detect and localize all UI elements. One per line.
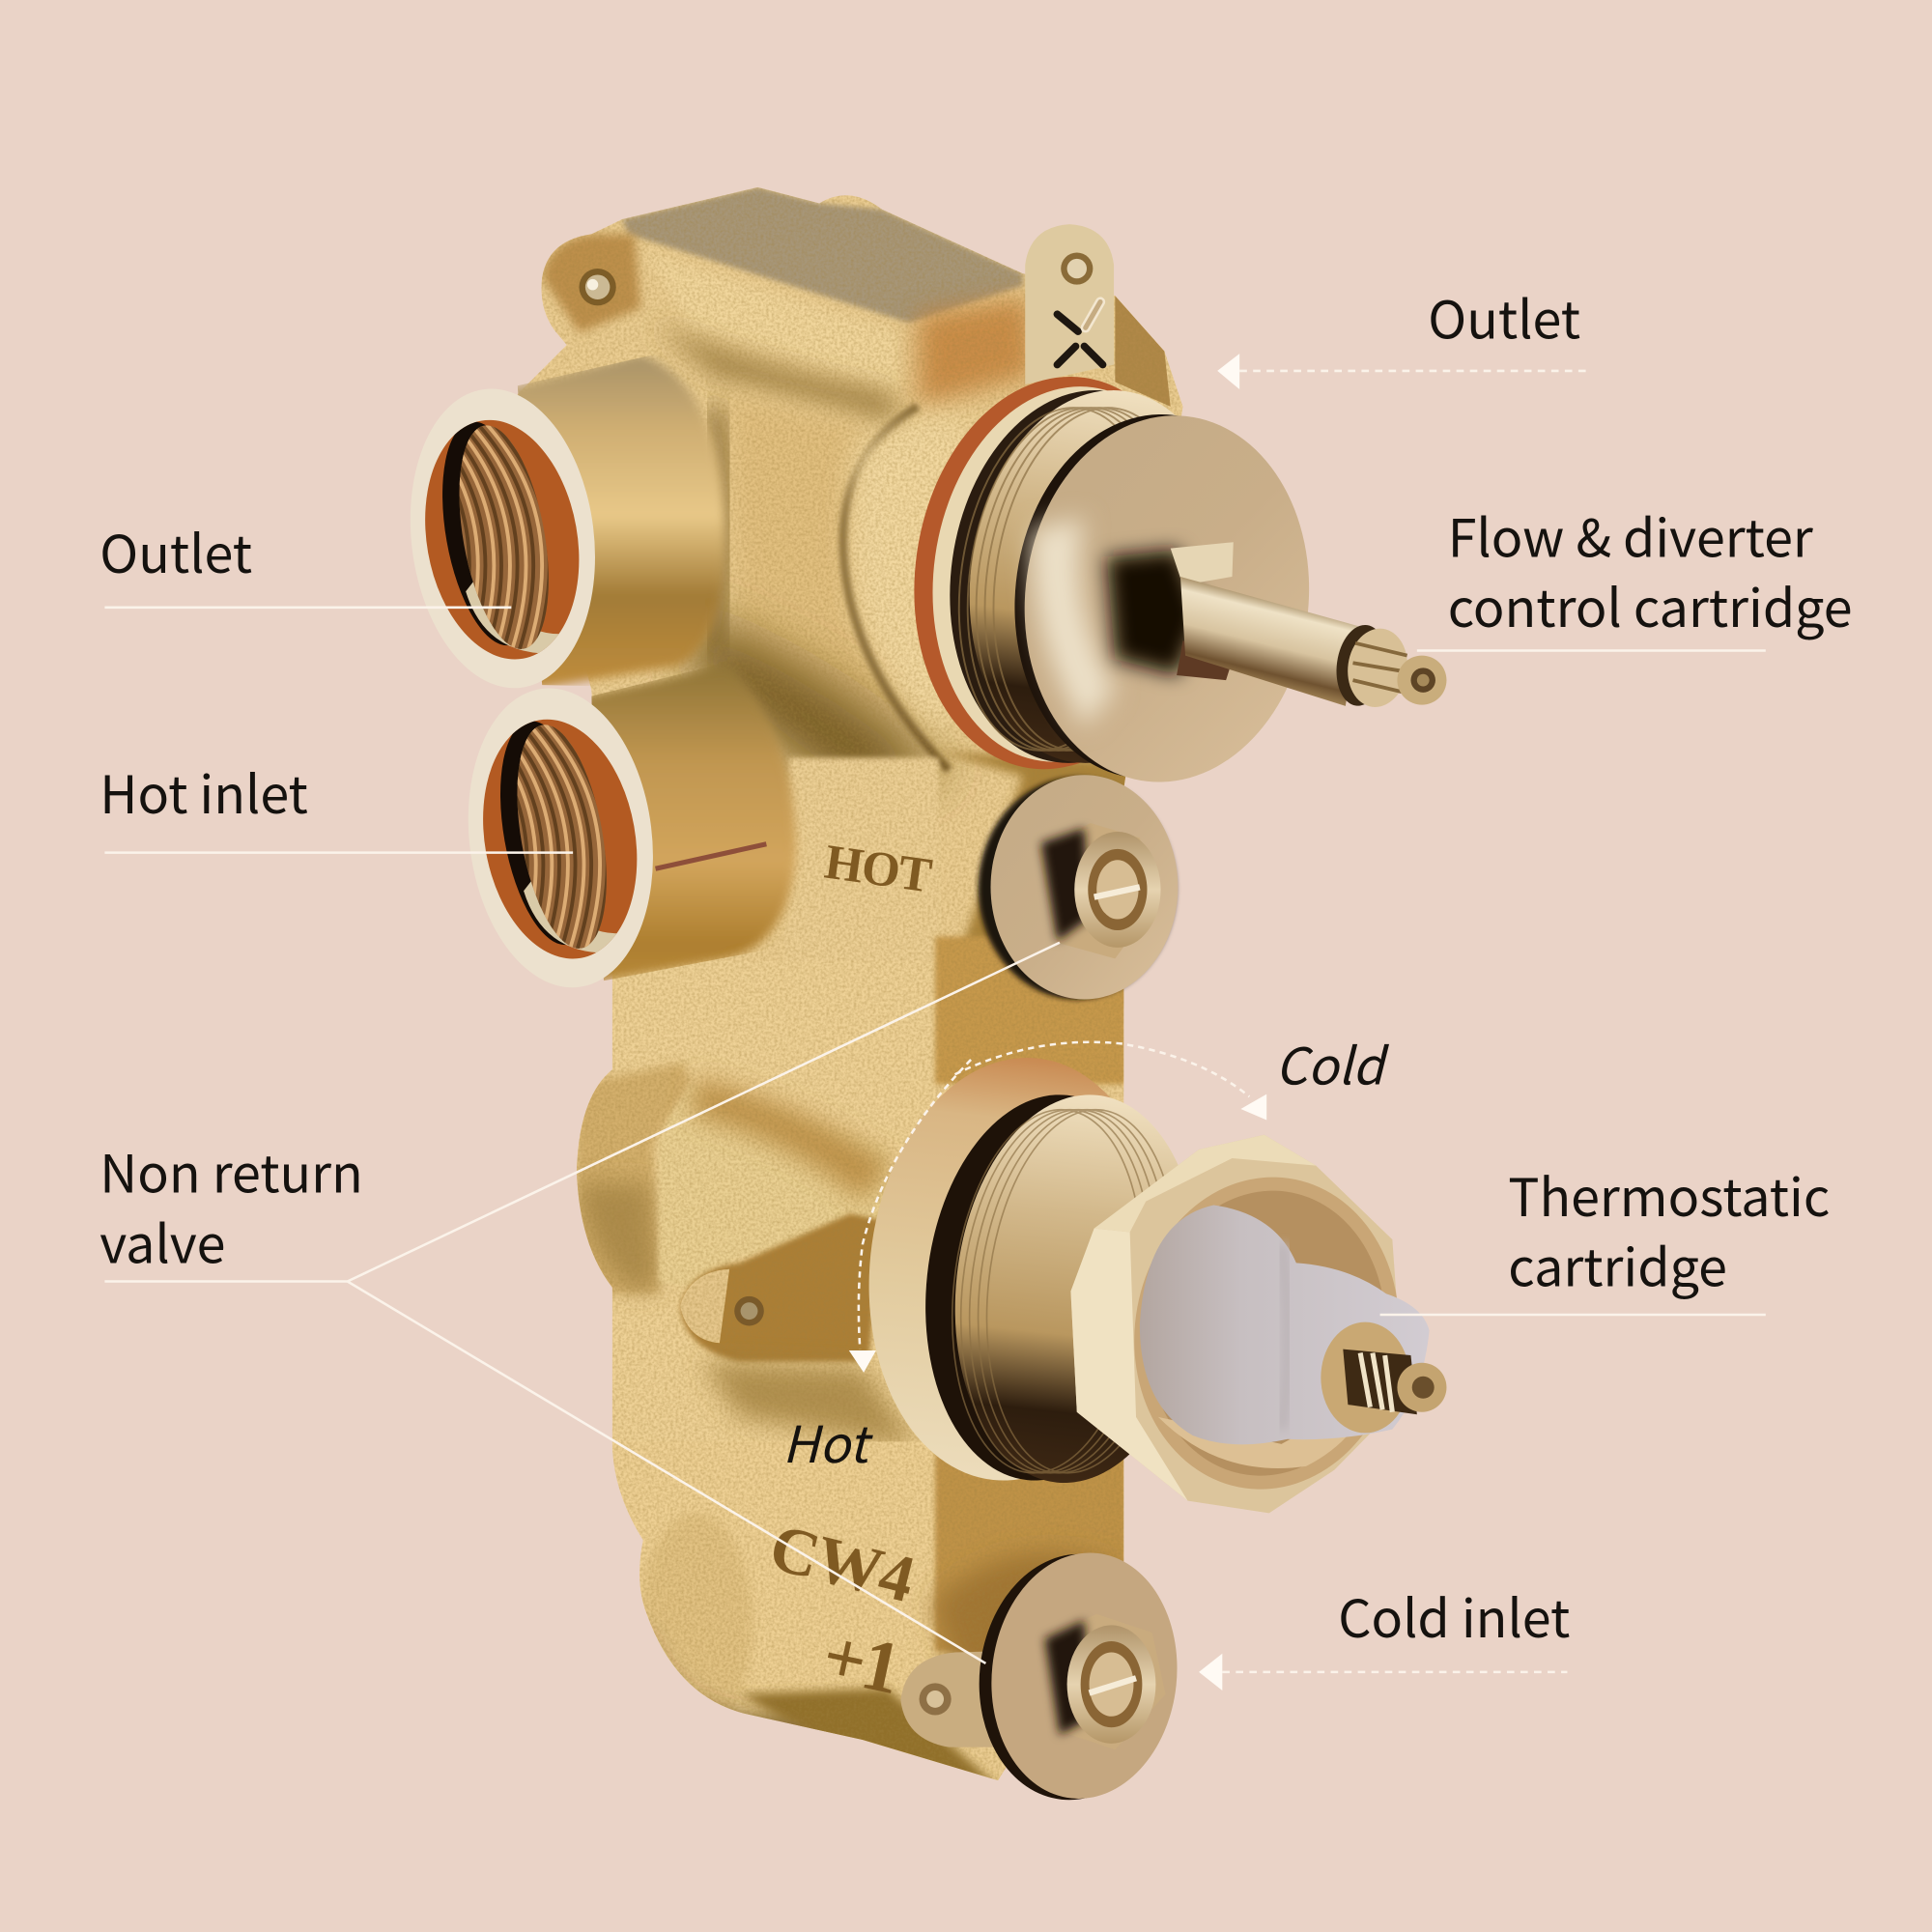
- hot inlet port: [452, 666, 796, 998]
- arrow: rotation to cold: [955, 1042, 1266, 1120]
- cast marking: CW4: CW4: [763, 1510, 922, 1616]
- arrow: outlet right: [1217, 354, 1586, 389]
- arrow: cold inlet: [1199, 1654, 1567, 1690]
- label: cold inlet: Cold inlet: [1338, 1577, 1570, 1653]
- label: non return valve: Non return: [99, 1133, 363, 1208]
- control stem: [1180, 577, 1446, 711]
- white cartridge insert: [1140, 1205, 1430, 1444]
- infographic canvas: [100, 187, 1851, 1801]
- label: hot inlet: Hot inlet: [99, 753, 308, 829]
- hot side non return valve: [979, 775, 1178, 999]
- label: thermostatic cartridge: Thermostatic: [1508, 1156, 1830, 1232]
- label: flow and diverter control cartridge: Flow & diverter: [1448, 497, 1813, 573]
- label: hot rotation: Hot: [782, 1405, 874, 1478]
- label: outlet right: Outlet: [1428, 279, 1580, 355]
- label: thermostatic cartridge: cartridge: [1508, 1227, 1727, 1302]
- flow and diverter cartridge: [890, 358, 1446, 796]
- leader: hot inlet: [104, 852, 573, 854]
- arrow: rotation to hot: [849, 1060, 971, 1373]
- label: outlet left: Outlet: [99, 513, 252, 588]
- cast marking: +1: +1: [816, 1614, 905, 1710]
- label: flow and diverter control cartridge: control cartridge: [1448, 567, 1853, 642]
- leader: outlet left: [104, 607, 511, 609]
- lower mounting lug: [900, 1651, 1005, 1747]
- valve body casting: [518, 187, 1182, 1780]
- leader: flow and diverter cartridge: [1417, 649, 1766, 651]
- mounting hole: centre lug: [734, 1296, 764, 1325]
- cold side non return valve: [900, 1544, 1189, 1809]
- mounting plate with logo: [1025, 224, 1114, 384]
- hex nut: [1070, 1135, 1400, 1513]
- cast marking: HOT: HOT: [821, 836, 935, 903]
- outlet port, upper left: [394, 355, 724, 698]
- splined spindle: [1321, 1322, 1446, 1433]
- thermostatic cartridge assembly: [848, 1043, 1446, 1513]
- leader: thermostatic cartridge: [1380, 1314, 1766, 1316]
- brass valve illustration: [411, 187, 1580, 1801]
- mounting lug: top left: [579, 269, 616, 305]
- label: cold rotation: Cold: [1275, 1026, 1390, 1099]
- label: non return valve: valve: [99, 1203, 225, 1278]
- leader: non return valve: [104, 943, 1060, 1663]
